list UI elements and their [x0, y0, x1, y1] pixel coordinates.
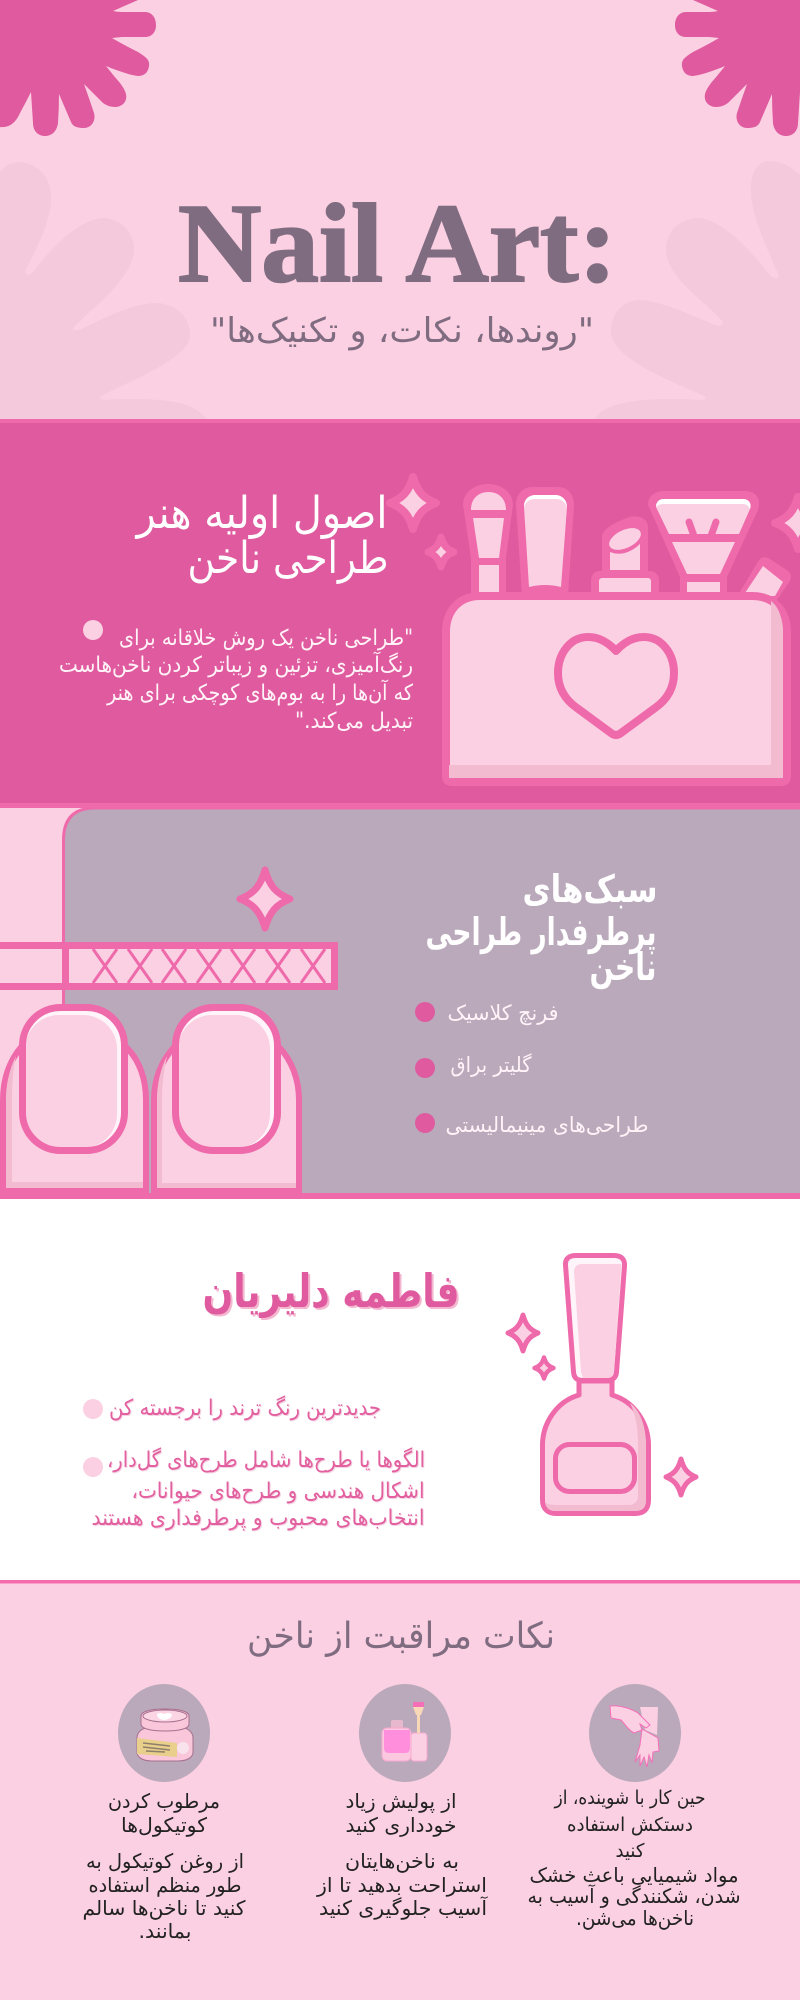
bullet: first [83, 1399, 103, 1419]
nail left [22, 1008, 124, 1150]
bottle shading [546, 1403, 646, 1511]
text: polish title: خودداری کنید [346, 1813, 456, 1837]
nail tube [516, 487, 574, 596]
bag shading [449, 601, 783, 778]
card: avoid excess polish [316, 1684, 488, 1920]
heading: basics [135, 488, 388, 584]
text: gloves body: شدن، شکنندگی و آسیب به [528, 1883, 740, 1908]
icon: small sparkle [534, 1358, 554, 1378]
text: gloves body: ناخن‌ها می‌شن. [576, 1906, 694, 1930]
text: second bullet: الگوها یا طرح‌ها شامل طرح‌های گل‌دار، [107, 1447, 425, 1473]
background leaf left [0, 162, 207, 420]
card: gloves [528, 1684, 740, 1930]
text: moisturize body [82, 1849, 246, 1943]
icon: sparkle [240, 870, 290, 928]
paragraph: description [59, 626, 413, 734]
text: moisturize body: از روغن کوتیکول به [86, 1849, 244, 1873]
text: gloves title: حین کار با شوینده، از [554, 1787, 706, 1809]
text: gloves title: دستکش استفاده [567, 1814, 693, 1836]
heading: styles: ناخن [590, 945, 656, 989]
text: second bullet [92, 1447, 425, 1531]
icon: polish bottle [542, 1256, 648, 1514]
heading: styles: سبک‌های [522, 867, 658, 911]
icon: sparkle right [775, 497, 800, 549]
paragraph: description: تبدیل می‌کند." [295, 709, 413, 734]
list: styles: فرنچ کلاسیک [448, 1001, 558, 1025]
list: styles: طراحی‌های مینیمالیستی [446, 1113, 648, 1137]
list: styles: گلیتر براق [450, 1053, 532, 1077]
paragraph: description: "طراحی ناخن یک روش خلاقانه برای [119, 626, 413, 651]
grey card [64, 808, 800, 1200]
panel: header [0, 0, 800, 420]
paragraph: description: که آن‌ها را به بوم‌های کوچکی برای هنر [106, 679, 413, 706]
bullet: second [83, 1457, 103, 1477]
small stick [735, 557, 791, 610]
panel: popular styles [0, 808, 800, 1200]
text: polish body: به ناخن‌هایتان [345, 1849, 459, 1873]
heading: styles [426, 867, 658, 989]
background leaf right [594, 161, 800, 420]
icon: hands [610, 1706, 659, 1767]
text: gloves title: کنید [616, 1840, 645, 1862]
heading: care tips: نکات مراقبت از ناخن [247, 1616, 555, 1657]
title: Nail Art: [178, 182, 617, 306]
text: moisturize body: بمانند. [138, 1919, 192, 1943]
icon: makeup bag [446, 484, 791, 782]
subtitle: "روندها، نکات، و تکنیک‌ها" [210, 311, 594, 351]
heading: basics: طراحی ناخن [188, 533, 388, 584]
panel: trending colours [0, 1199, 800, 1580]
heading: styles: پرطرفدار طراحی [426, 910, 656, 954]
list: styles [415, 1001, 648, 1137]
text: moisturize body: کنید تا ناخن‌ها سالم [82, 1896, 246, 1920]
panel: nail care tips [0, 1580, 800, 2000]
icon: nail file [0, 945, 334, 987]
text: moisturize title [108, 1789, 220, 1837]
icon: finger right [154, 1008, 299, 1191]
icon: heart [558, 637, 674, 735]
text: gloves body [528, 1863, 740, 1930]
heading: basics: اصول اولیه هنر [135, 488, 388, 539]
nail right [176, 1008, 278, 1150]
text: polish body: استراحت بدهید تا از [316, 1873, 487, 1897]
icon: sparkle small [428, 537, 454, 567]
bullet dot [83, 620, 103, 640]
icon: finger left [3, 1008, 146, 1191]
icon: sparkle right [666, 1459, 696, 1495]
icon: cream jar [137, 1709, 193, 1761]
text: moisturize body: طور منظم استفاده [88, 1873, 242, 1897]
wide brush [648, 491, 759, 596]
bottle body [542, 1381, 648, 1514]
bottle cap [565, 1256, 625, 1380]
text: moisturize title: مرطوب کردن [108, 1789, 220, 1813]
round brush [463, 484, 513, 596]
paragraph: description: رنگ‌آمیزی، تزئین و زیباتر کردن ناخن‌هاست [59, 651, 413, 678]
heading: author name: فاطمه دلیریان [202, 1264, 460, 1318]
text: second bullet: انتخاب‌های محبوب و پرطرفداری هستند [92, 1506, 424, 1531]
text: polish title [346, 1789, 456, 1837]
text: polish title: از پولیش زیاد [346, 1789, 456, 1814]
bottle label [556, 1444, 634, 1492]
text: moisturize title: کوتیکول‌ها [121, 1813, 207, 1837]
text: gloves title [554, 1787, 706, 1862]
text: first bullet: جدیدترین رنگ ترند را برجسته کن [109, 1395, 381, 1421]
bag body [446, 596, 787, 782]
text: second bullet: اشکال هندسی و طرح‌های حیوانات، [132, 1479, 424, 1504]
icon: sparkle [508, 1315, 538, 1351]
card: moisturize [82, 1684, 246, 1943]
panel: basics of nail art [0, 419, 800, 808]
text: polish body [316, 1849, 488, 1920]
text: polish body: آسیب جلوگیری کنید [319, 1895, 488, 1920]
icon: polish and brush [382, 1702, 427, 1761]
text: gloves body: مواد شیمیایی باعث خشک [530, 1863, 738, 1887]
flower top left [0, 0, 156, 136]
icon: sparkle large [390, 477, 436, 529]
flower top right [675, 0, 800, 136]
lipstick [591, 517, 659, 599]
